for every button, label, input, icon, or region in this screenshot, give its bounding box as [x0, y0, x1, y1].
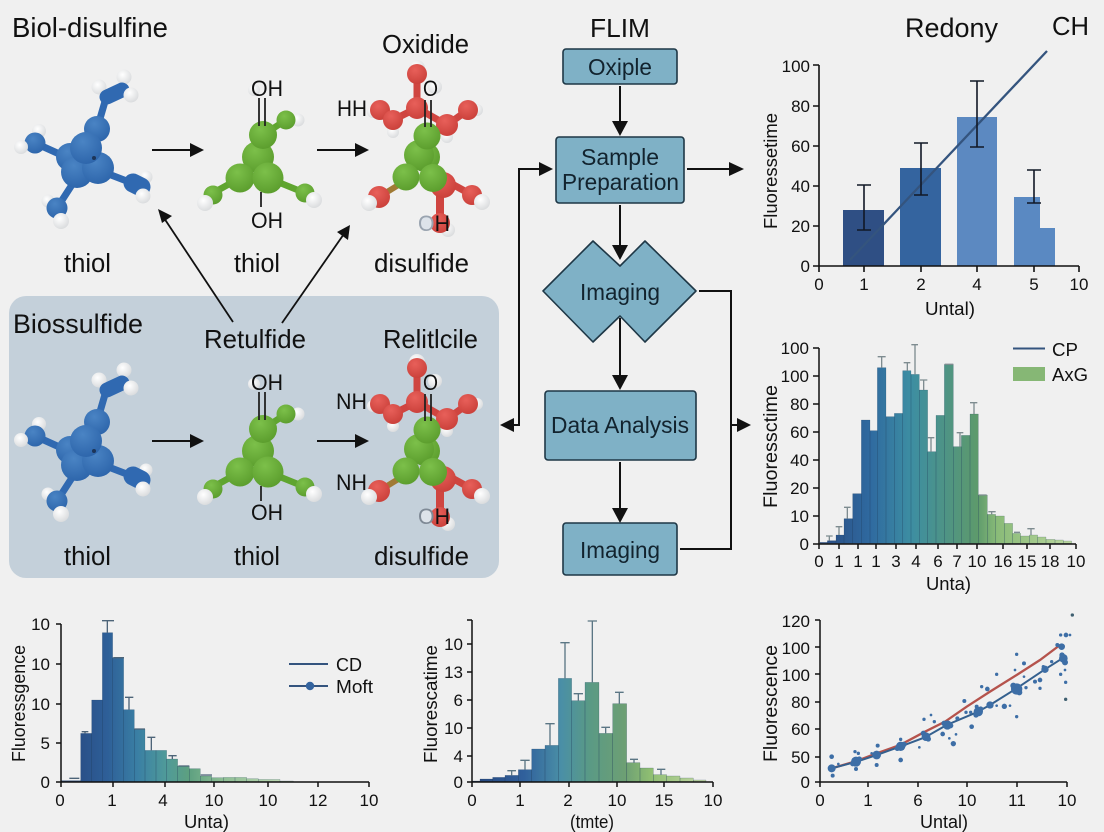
legend: Moft	[336, 676, 374, 697]
y tick labels: 80	[790, 395, 809, 414]
x tick labels: 1	[515, 791, 525, 810]
labels on bottom molecules	[251, 370, 450, 529]
heading: Oxidide: Oxidide	[382, 31, 469, 59]
label: thiol: thiol	[234, 250, 280, 278]
x tick labels: 1	[871, 552, 881, 571]
heading: Relitlcile: Relitlcile	[383, 324, 478, 354]
flow box: Imaging	[563, 523, 677, 575]
legend: CP	[1052, 339, 1078, 360]
flow decision: Imaging	[543, 241, 696, 342]
x tick labels: 0	[55, 791, 65, 810]
y tick labels: 50	[791, 748, 810, 767]
y tick labels: 10	[444, 719, 463, 738]
label: disulfide: disulfide	[374, 541, 469, 571]
arrow: thiol to thiol bottom	[152, 434, 204, 448]
y axis title: Fluoressetime	[760, 113, 781, 229]
x tick labels: 3	[891, 552, 901, 571]
y tick labels: 10	[31, 695, 50, 714]
panel: biossulfide background	[9, 296, 499, 578]
y tick labels	[31, 615, 50, 792]
x tick labels: 10	[1070, 275, 1088, 294]
flow decision: Imaging: Imaging	[580, 279, 660, 305]
x tick labels: 2	[563, 791, 573, 810]
arrow: diagonal up right	[282, 225, 350, 323]
labels on bottom molecules: NH	[336, 470, 367, 495]
y tick labels: 80	[791, 97, 810, 116]
arrow: Sample Preparation to chart	[687, 162, 744, 176]
x axis title: Unta)	[926, 573, 971, 594]
x tick labels: 0	[815, 791, 825, 810]
labels on bottom molecules: OH	[251, 370, 283, 395]
flow box: Oxiple	[563, 49, 677, 84]
title: Biol-disulfine: Biol-disulfine	[12, 12, 168, 43]
y tick labels: 100	[782, 639, 810, 658]
bars	[472, 621, 706, 782]
x tick labels: 1	[853, 552, 863, 571]
labels on top molecules: O	[423, 76, 438, 101]
axes	[813, 348, 1076, 549]
chart: histogram middle right	[760, 339, 1088, 594]
flow box: Sample Preparation: Preparation	[562, 169, 679, 195]
y tick labels: 10	[31, 655, 50, 674]
arrow: Imaging to Data Analysis	[612, 318, 628, 390]
x tick labels: 0	[814, 275, 824, 294]
legend	[1013, 339, 1088, 385]
x tick labels: 6	[913, 791, 923, 810]
molecule: green thiol top	[197, 84, 322, 211]
x tick labels: 1	[107, 791, 117, 810]
y tick labels	[782, 612, 810, 792]
x axis title: Untal)	[920, 811, 968, 832]
trend line	[850, 51, 1047, 260]
y tick labels: 6	[454, 691, 463, 710]
axes	[467, 620, 713, 787]
labels on top molecules: OH	[251, 76, 283, 101]
y tick labels: 20	[791, 217, 810, 236]
arrow: loop from Imaging to charts	[680, 291, 751, 549]
x tick labels: 6	[933, 552, 943, 571]
y tick labels	[444, 635, 463, 792]
y tick labels: 100	[781, 339, 809, 358]
x tick labels: 0	[467, 791, 477, 810]
x tick labels: 12	[309, 791, 327, 810]
x tick labels	[814, 552, 1085, 571]
arrow: Data Analysis to Imaging	[612, 462, 628, 523]
y tick labels	[781, 339, 809, 554]
label: thiol: thiol	[64, 250, 111, 278]
x tick labels: 1	[863, 791, 873, 810]
x tick labels: 2	[916, 275, 926, 294]
x tick labels: 10	[360, 791, 378, 810]
y axis title: Fluorescence	[760, 645, 782, 762]
x tick labels: 10	[259, 791, 277, 810]
y tick labels: 60	[790, 423, 809, 442]
x tick labels: 4	[911, 552, 921, 571]
x tick labels: 10	[1067, 552, 1085, 571]
labels on top molecules: HH	[337, 96, 367, 121]
bars	[820, 345, 1072, 543]
labels on top molecules	[251, 76, 450, 236]
arrow: diagonal up left	[158, 209, 233, 322]
scatter and fit lines	[828, 613, 1074, 778]
x tick labels	[467, 791, 722, 810]
arrow: thiol to disulfide bottom	[317, 434, 369, 448]
y tick labels: 60	[791, 720, 810, 739]
y tick labels	[782, 57, 810, 276]
x tick labels: 16	[994, 552, 1012, 571]
labels on bottom molecules: NH	[336, 389, 367, 414]
y tick labels: 40	[790, 451, 809, 470]
y tick labels: 13	[444, 663, 463, 682]
legend	[289, 654, 374, 697]
arrow: feedback to sample preparation and panel	[500, 162, 553, 432]
label: disulfide: disulfide	[374, 248, 469, 278]
x tick labels: 11	[1008, 791, 1026, 810]
y tick labels: 0	[41, 773, 50, 792]
y tick labels: 0	[801, 773, 810, 792]
label: thiol: thiol	[64, 543, 111, 571]
y tick labels: 20	[790, 479, 809, 498]
y tick labels: 0	[454, 773, 463, 792]
axes	[813, 65, 1079, 272]
arrow: Oxiple to Sample Preparation	[612, 86, 628, 136]
x tick labels	[55, 791, 378, 810]
heading: Retulfide: Retulfide	[204, 326, 306, 354]
arrow: thiol to disulfide top	[317, 143, 369, 157]
bars	[843, 117, 1055, 266]
molecule: blue thiol top	[14, 70, 152, 229]
heading: Redony: Redony	[905, 13, 998, 43]
molecule: blue thiol bottom	[14, 362, 152, 522]
flow box: Sample Preparation: Sample	[581, 144, 659, 170]
chart: histogram bottom left	[8, 615, 378, 832]
y tick labels: 0	[801, 257, 810, 276]
heading: FLIM: FLIM	[590, 13, 650, 43]
label: thiol: thiol	[234, 543, 280, 571]
labels on bottom molecules: OH	[418, 504, 450, 529]
x tick labels: 18	[1041, 552, 1059, 571]
flow box: Sample Preparation	[556, 137, 684, 203]
y tick labels: 40	[791, 177, 810, 196]
y axis title: Fluoressctime	[760, 385, 782, 508]
x tick labels: 15	[655, 791, 673, 810]
labels on bottom molecules: O	[423, 370, 438, 395]
error bars	[857, 81, 1041, 230]
molecule: red disulfide bottom	[361, 354, 490, 531]
flow box: Oxiple: Oxiple	[588, 54, 652, 80]
flow box: Data Analysis	[545, 391, 696, 460]
x tick labels: 1	[834, 552, 844, 571]
label: CH: CH	[1052, 11, 1089, 41]
chart: bar chart top right	[760, 51, 1088, 319]
flow box: Imaging: Imaging	[580, 537, 660, 563]
x tick labels: 4	[158, 791, 168, 810]
y tick labels: 4	[454, 747, 463, 766]
molecule: red disulfide top	[361, 60, 490, 237]
x tick labels: 1	[859, 275, 869, 294]
legend: CD	[336, 654, 362, 675]
flow box: Data Analysis: Data Analysis	[551, 412, 689, 438]
y tick labels: 100	[781, 367, 809, 386]
y tick labels: 120	[782, 612, 810, 631]
x tick labels: 10	[958, 791, 976, 810]
x tick labels	[814, 275, 1088, 294]
labels on top molecules: OH	[418, 211, 450, 236]
y axis title: Fluorescatime	[420, 645, 441, 763]
y tick labels: 10	[790, 507, 809, 526]
molecule: green thiol bottom	[197, 378, 322, 505]
labels on bottom molecules: OH	[251, 500, 283, 525]
x tick labels: 5	[1029, 275, 1039, 294]
arrow: Sample Preparation to Imaging	[612, 205, 628, 260]
x tick labels: 4	[972, 275, 982, 294]
arrow: thiol to thiol top	[152, 143, 204, 157]
x tick labels: 10	[608, 791, 626, 810]
x tick labels: 10	[968, 552, 986, 571]
x tick labels: 10	[205, 791, 223, 810]
chart: scatter bottom right	[760, 612, 1076, 832]
x tick labels: 7	[952, 552, 962, 571]
y tick labels: 5	[41, 734, 50, 753]
x axis title: Untal)	[925, 298, 975, 319]
y axis title: Fluoressgence	[8, 645, 29, 762]
chart: histogram bottom centre	[420, 620, 722, 832]
y tick labels: 60	[791, 137, 810, 156]
x tick labels: 10	[704, 791, 722, 810]
x tick labels: 10	[1058, 791, 1076, 810]
axes	[815, 620, 1067, 787]
axes	[56, 624, 369, 787]
y tick labels: 100	[782, 57, 810, 76]
y tick labels: 80	[791, 693, 810, 712]
y tick labels: 100	[782, 666, 810, 685]
x tick labels: 0	[814, 552, 824, 571]
legend: AxG	[1052, 364, 1088, 385]
bars	[61, 621, 293, 782]
heading: Biossulfide: Biossulfide	[13, 309, 143, 339]
x tick labels	[815, 791, 1076, 810]
y tick labels: 10	[444, 635, 463, 654]
x tick labels: 15	[1018, 552, 1036, 571]
labels on top molecules: OH	[251, 208, 283, 233]
x axis title: Unta)	[184, 811, 229, 832]
y tick labels: 10	[31, 615, 50, 634]
x axis title: (tmte)	[570, 811, 614, 832]
y tick labels: 0	[800, 535, 809, 554]
